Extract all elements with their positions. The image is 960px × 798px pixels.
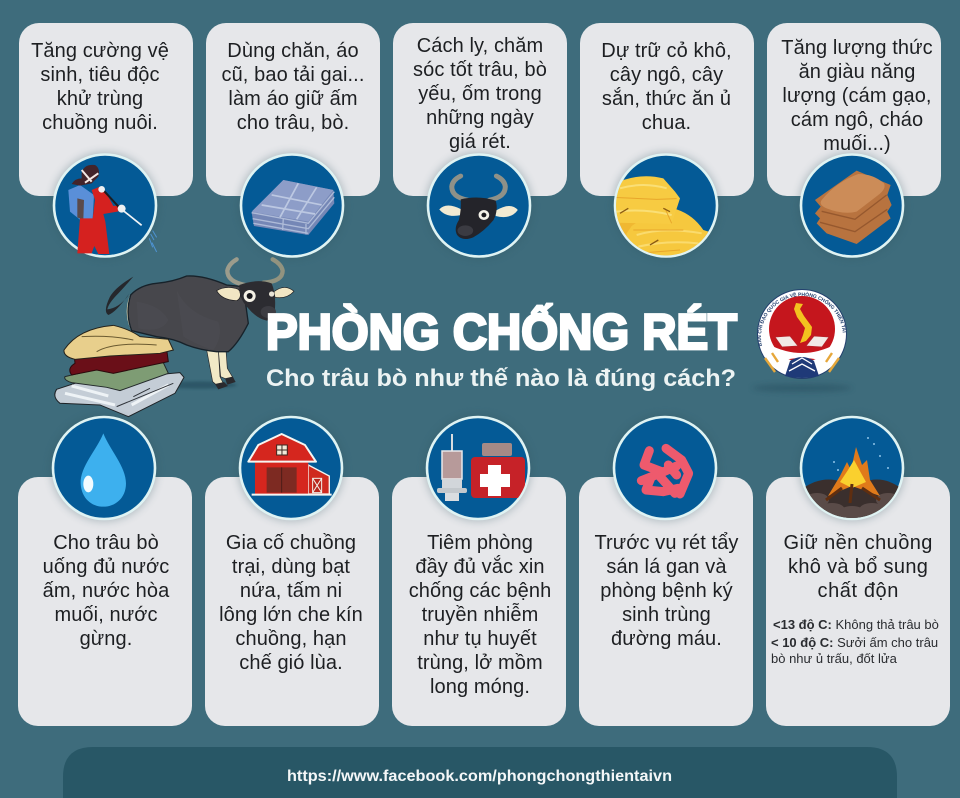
text: vaccination: trùng, lở mồm	[417, 652, 543, 674]
text: warm coats: làm áo giữ ấm	[228, 88, 358, 110]
icon: red barn	[237, 414, 345, 522]
logo: national steering committee emblem	[757, 289, 847, 392]
text: dry floor: Giữ nền chuồng	[784, 532, 932, 554]
text: reinforce barn: nứa, tấm ni	[240, 580, 342, 602]
text: temperature notes: bò như ủ trấu, đốt lửa	[771, 651, 898, 666]
text: dry floor	[784, 532, 932, 602]
text: warm water	[43, 532, 170, 650]
text: warm coats: cho trâu, bò.	[237, 112, 349, 134]
text: disinfect barn: khử trùng	[57, 88, 143, 110]
icon: syringe and medicine bottle	[424, 414, 532, 522]
text: vaccination	[409, 532, 551, 698]
text: store fodder: sắn, thức ăn ủ	[602, 87, 731, 110]
text: warm water: Cho trâu bò	[53, 532, 159, 554]
text: warm coats: Dùng chăn, áo	[227, 40, 359, 62]
text: warm water: uống đủ nước	[43, 556, 169, 578]
illustration: folded clothes pile	[55, 325, 184, 417]
subtitle: Cho trâu bò như thế nào là đúng cách?	[266, 365, 736, 392]
text: energy-rich feed: Tăng lượng thức	[781, 37, 933, 59]
text: deworming: phòng bệnh ký	[600, 580, 733, 602]
text: care for weak animals: yếu, ốm trong	[418, 83, 542, 105]
icon: hay bales	[610, 152, 720, 263]
text: disinfect barn: chuồng nuôi.	[42, 112, 158, 134]
text: energy-rich feed: muối...)	[823, 133, 891, 155]
text: dry floor: chất độn	[818, 580, 898, 602]
text: vaccination: truyền nhiễm	[422, 603, 538, 626]
text: energy-rich feed: ăn giàu năng	[799, 61, 915, 83]
panel: care for weak animals	[393, 23, 567, 260]
text: care for weak animals: những ngày	[426, 107, 534, 129]
text: disinfect barn: sinh, tiêu độc	[40, 64, 160, 86]
text: care for weak animals: sóc tốt trâu, bò	[413, 59, 547, 81]
text: warm water: muối, nước	[54, 604, 158, 626]
panel: vaccination	[392, 414, 566, 726]
logo: national steering committee emblem: BAN CHỈ ĐẠO QUỐC GIA VỀ PHÒNG CHỐNG THIÊN TAI	[758, 292, 846, 346]
text: store fodder: Dự trữ cỏ khô,	[601, 40, 732, 62]
text: store fodder	[601, 40, 732, 134]
icon: liver fluke parasites	[611, 414, 719, 522]
text: temperature notes	[771, 617, 939, 666]
text: warm water: gừng.	[80, 628, 132, 650]
text: vaccination: như tụ huyết	[423, 628, 537, 650]
text: vaccination: Tiêm phòng	[427, 532, 533, 554]
text: disinfect barn	[31, 40, 169, 134]
text: reinforce barn: trại, dùng bạt	[232, 556, 350, 578]
text: temperature notes: < 10 độ C: Sưởi ấm cho trâu	[771, 635, 938, 650]
footer link: https://www.facebook.com/phongchongthientaivn	[287, 768, 672, 785]
footer bar	[63, 747, 897, 798]
icon: person spraying disinfectant	[51, 152, 159, 260]
text: disinfect barn: Tăng cường vệ	[31, 40, 169, 62]
text: deworming	[594, 532, 739, 650]
text: energy-rich feed: lượng (cám gạo,	[782, 85, 932, 107]
text: deworming: sán lá gan và	[606, 556, 727, 578]
panel: disinfect barn	[19, 23, 193, 260]
text: warm coats: cũ, bao tải gai...	[221, 64, 365, 86]
text: warm water: ấm, nước hòa	[43, 580, 170, 602]
title: PHÒNG CHỐNG RÉT	[266, 303, 737, 360]
text: energy-rich feed: cám ngô, cháo	[791, 109, 923, 131]
text: care for weak animals: Cách ly, chăm	[417, 35, 543, 57]
text: care for weak animals: giá rét.	[449, 131, 511, 153]
text: reinforce barn	[219, 532, 363, 674]
illustration: buffalo	[106, 259, 294, 389]
panel: deworming	[579, 414, 753, 726]
text: warm coats	[221, 40, 365, 134]
text: reinforce barn: lông lớn che kín	[219, 604, 363, 626]
text: vaccination: đầy đủ vắc xin	[415, 555, 545, 578]
panel: dry floor and temperature notes	[766, 414, 950, 726]
panel: reinforce barn	[205, 414, 379, 726]
text: vaccination: long móng.	[430, 676, 530, 698]
text: temperature notes: <13 độ C: Không thả trâu bò	[773, 617, 939, 632]
text: deworming: Trước vụ rét tẩy	[594, 532, 739, 554]
text: reinforce barn: chế gió lùa.	[239, 652, 343, 674]
text: reinforce barn: Gia cố chuồng	[226, 532, 356, 554]
icon: buffalo head	[425, 152, 533, 260]
panel: warm water	[18, 414, 192, 726]
text: care for weak animals	[413, 35, 547, 153]
text: store fodder: chua.	[642, 112, 691, 134]
icon: water drop	[50, 414, 158, 522]
icon: folded blanket	[238, 152, 346, 260]
icon: feed sacks	[798, 152, 906, 260]
panel: energy-rich feed	[767, 23, 941, 260]
text: reinforce barn: chuồng, hạn	[235, 628, 347, 650]
panel: warm coats	[206, 23, 380, 260]
text: store fodder: cây ngô, cây	[610, 64, 723, 86]
text: deworming: đường máu.	[611, 628, 722, 650]
text: deworming: sinh trùng	[622, 604, 711, 626]
text: vaccination: chống các bệnh	[409, 580, 551, 602]
text: energy-rich feed	[781, 37, 933, 155]
panel: store fodder	[580, 23, 754, 263]
icon: campfire	[798, 414, 906, 522]
text: dry floor: khô và bổ sung	[788, 556, 928, 578]
